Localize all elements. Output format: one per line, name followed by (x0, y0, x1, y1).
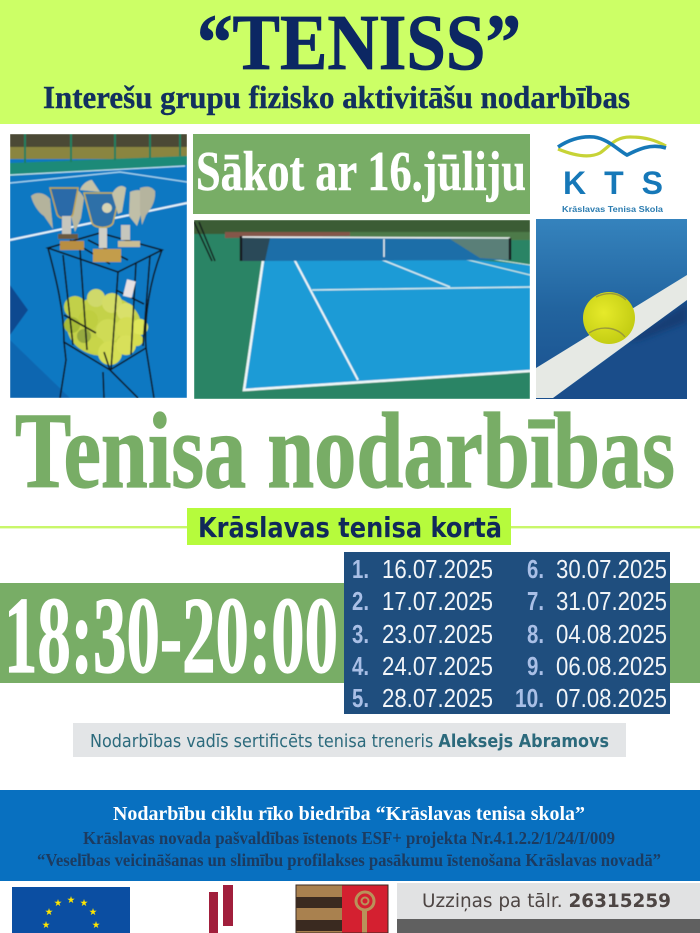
dates column 2 (515, 556, 667, 713)
photo: tennis court (194, 220, 530, 399)
contact info (397, 883, 700, 933)
logo: EU flag: ★ (92, 920, 100, 931)
net (241, 236, 510, 261)
logo: EU flag: ★ (54, 898, 62, 909)
dates column 1: 3. (352, 621, 369, 649)
organiser band: “Veselības veicināšanas un slimību profilakses pasākumu īstenošana Krāslavas novadā” (37, 850, 661, 870)
location label (0, 508, 700, 545)
logo: EU flag: ★ (45, 907, 53, 918)
dates column 2: 10. (515, 685, 544, 713)
dates column 1: 28.07.2025 (382, 685, 493, 713)
start date banner (193, 134, 530, 214)
title: “TENISS” (197, 0, 521, 87)
dates column 1 (352, 556, 493, 713)
dates column 2: 30.07.2025 (556, 556, 667, 584)
logo: Latvia marks (209, 885, 233, 933)
dates column 1: 24.07.2025 (382, 653, 493, 681)
trophies (31, 180, 155, 262)
logo: EU flag: ★ (67, 895, 75, 906)
dates column 1: 17.07.2025 (382, 588, 493, 616)
dates column 1: 1. (352, 556, 369, 584)
location label: Krāslavas tenisa kortā (198, 511, 502, 544)
dates column 2: 06.08.2025 (556, 653, 667, 681)
date list panel (344, 552, 670, 714)
contact info: Uzziņas pa tālr. 26315259 (422, 890, 671, 912)
tennis balls (64, 289, 148, 365)
subtitle: Interešu grupu fizisko aktivitāšu nodarbības (43, 79, 630, 115)
logo: EU flag (12, 887, 130, 933)
logo: KTS: KTS (563, 165, 663, 201)
trainer note (73, 723, 626, 757)
organiser band: Krāslavas novada pašvaldības īstenots ESF+ projekta Nr.4.1.2.2/1/24/I/009 (83, 828, 615, 848)
logo: EU flag: ★ (42, 920, 50, 931)
logo: EU flag: ★ (80, 898, 88, 909)
logo: KTS (558, 137, 666, 214)
dates column 2: 7. (527, 588, 544, 616)
dates column 2: 04.08.2025 (556, 621, 667, 649)
photo: tennis ball on line (536, 219, 687, 399)
header band (0, 0, 700, 124)
time band: 18:30-20:00 (4, 575, 338, 696)
dates column 2: 9. (527, 653, 544, 681)
dates column 2: 31.07.2025 (556, 588, 667, 616)
photo: trophies and ball basket (10, 134, 187, 398)
trainer note: Nodarbības vadīs sertificēts tenisa treneris Aleksejs Abramovs (90, 731, 609, 752)
organiser band (0, 790, 700, 881)
dates column 1: 5. (352, 685, 369, 713)
logo: EU flag: ★ (89, 907, 97, 918)
dates column 1: 4. (352, 653, 369, 681)
logo: KTS: Krāslavas Tenisa Skola (562, 204, 663, 214)
logo: coat of arms (296, 885, 388, 933)
dates column 2: 6. (527, 556, 544, 584)
wire basket (48, 233, 162, 398)
organiser band: Nodarbību ciklu rīko biedrība “Krāslavas tenisa skola” (113, 803, 585, 825)
start date banner: Sākot ar 16.jūliju (196, 141, 526, 203)
dates column 2: 07.08.2025 (556, 685, 667, 713)
dates column 1: 23.07.2025 (382, 621, 493, 649)
dates column 1: 2. (352, 588, 369, 616)
dates column 2: 8. (527, 621, 544, 649)
dates column 1: 16.07.2025 (382, 556, 493, 584)
